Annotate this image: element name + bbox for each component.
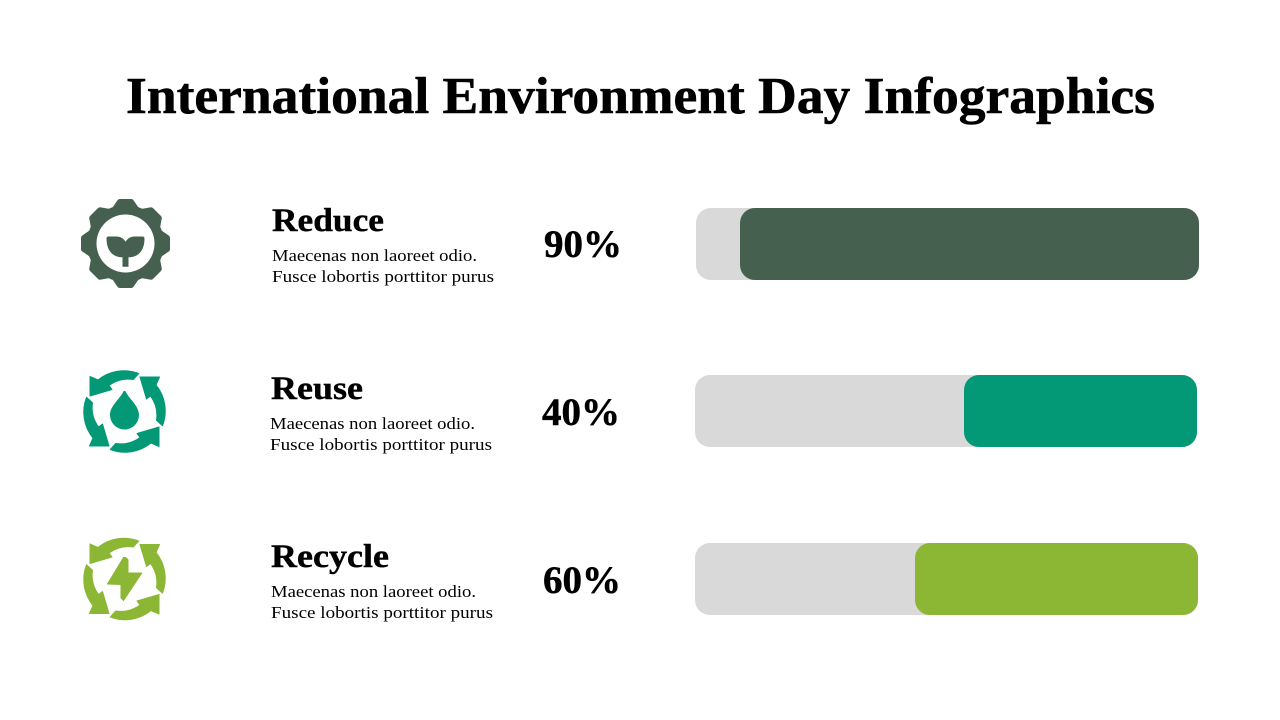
text block: Recycle description: Maecenas non laoreet odio.: [271, 582, 476, 601]
icon: energy bolt in circular arrows: [84, 538, 165, 620]
percentage: 60%: 60%: [543, 559, 621, 602]
text block: Reuse description: Maecenas non laoreet odio.: [270, 414, 475, 433]
row: Reuse: [84, 371, 1197, 454]
row: Recycle: [84, 538, 1198, 622]
progress bar: 60%: [695, 543, 1198, 615]
text block: Reduce description: [272, 246, 494, 286]
text block: Reuse description: Fusce lobortis porttitor purus: [270, 435, 492, 454]
percentage: 40%: 40%: [542, 391, 620, 434]
title: International Environment Day Infographics: [126, 68, 1155, 125]
text block: Reuse description: [270, 414, 492, 454]
row: Reduce: [81, 199, 1199, 288]
icon: water drop in circular arrows: [84, 371, 165, 452]
text block: Recycle description: [271, 582, 493, 622]
text block: Reduce description: Maecenas non laoreet odio.: [272, 246, 477, 265]
percentage: 90%: 90%: [544, 223, 622, 266]
text block: Reduce description: Fusce lobortis porttitor purus: [272, 267, 494, 286]
icon: gear with plant: [81, 199, 170, 288]
progress bar: 40%: [695, 375, 1197, 447]
heading: Reduce: Reduce: [272, 203, 384, 239]
heading: Recycle: Recycle: [271, 539, 389, 575]
heading: Reuse: Reuse: [271, 371, 363, 407]
text block: Recycle description: Fusce lobortis porttitor purus: [271, 603, 493, 622]
progress bar: 90%: [696, 208, 1199, 280]
